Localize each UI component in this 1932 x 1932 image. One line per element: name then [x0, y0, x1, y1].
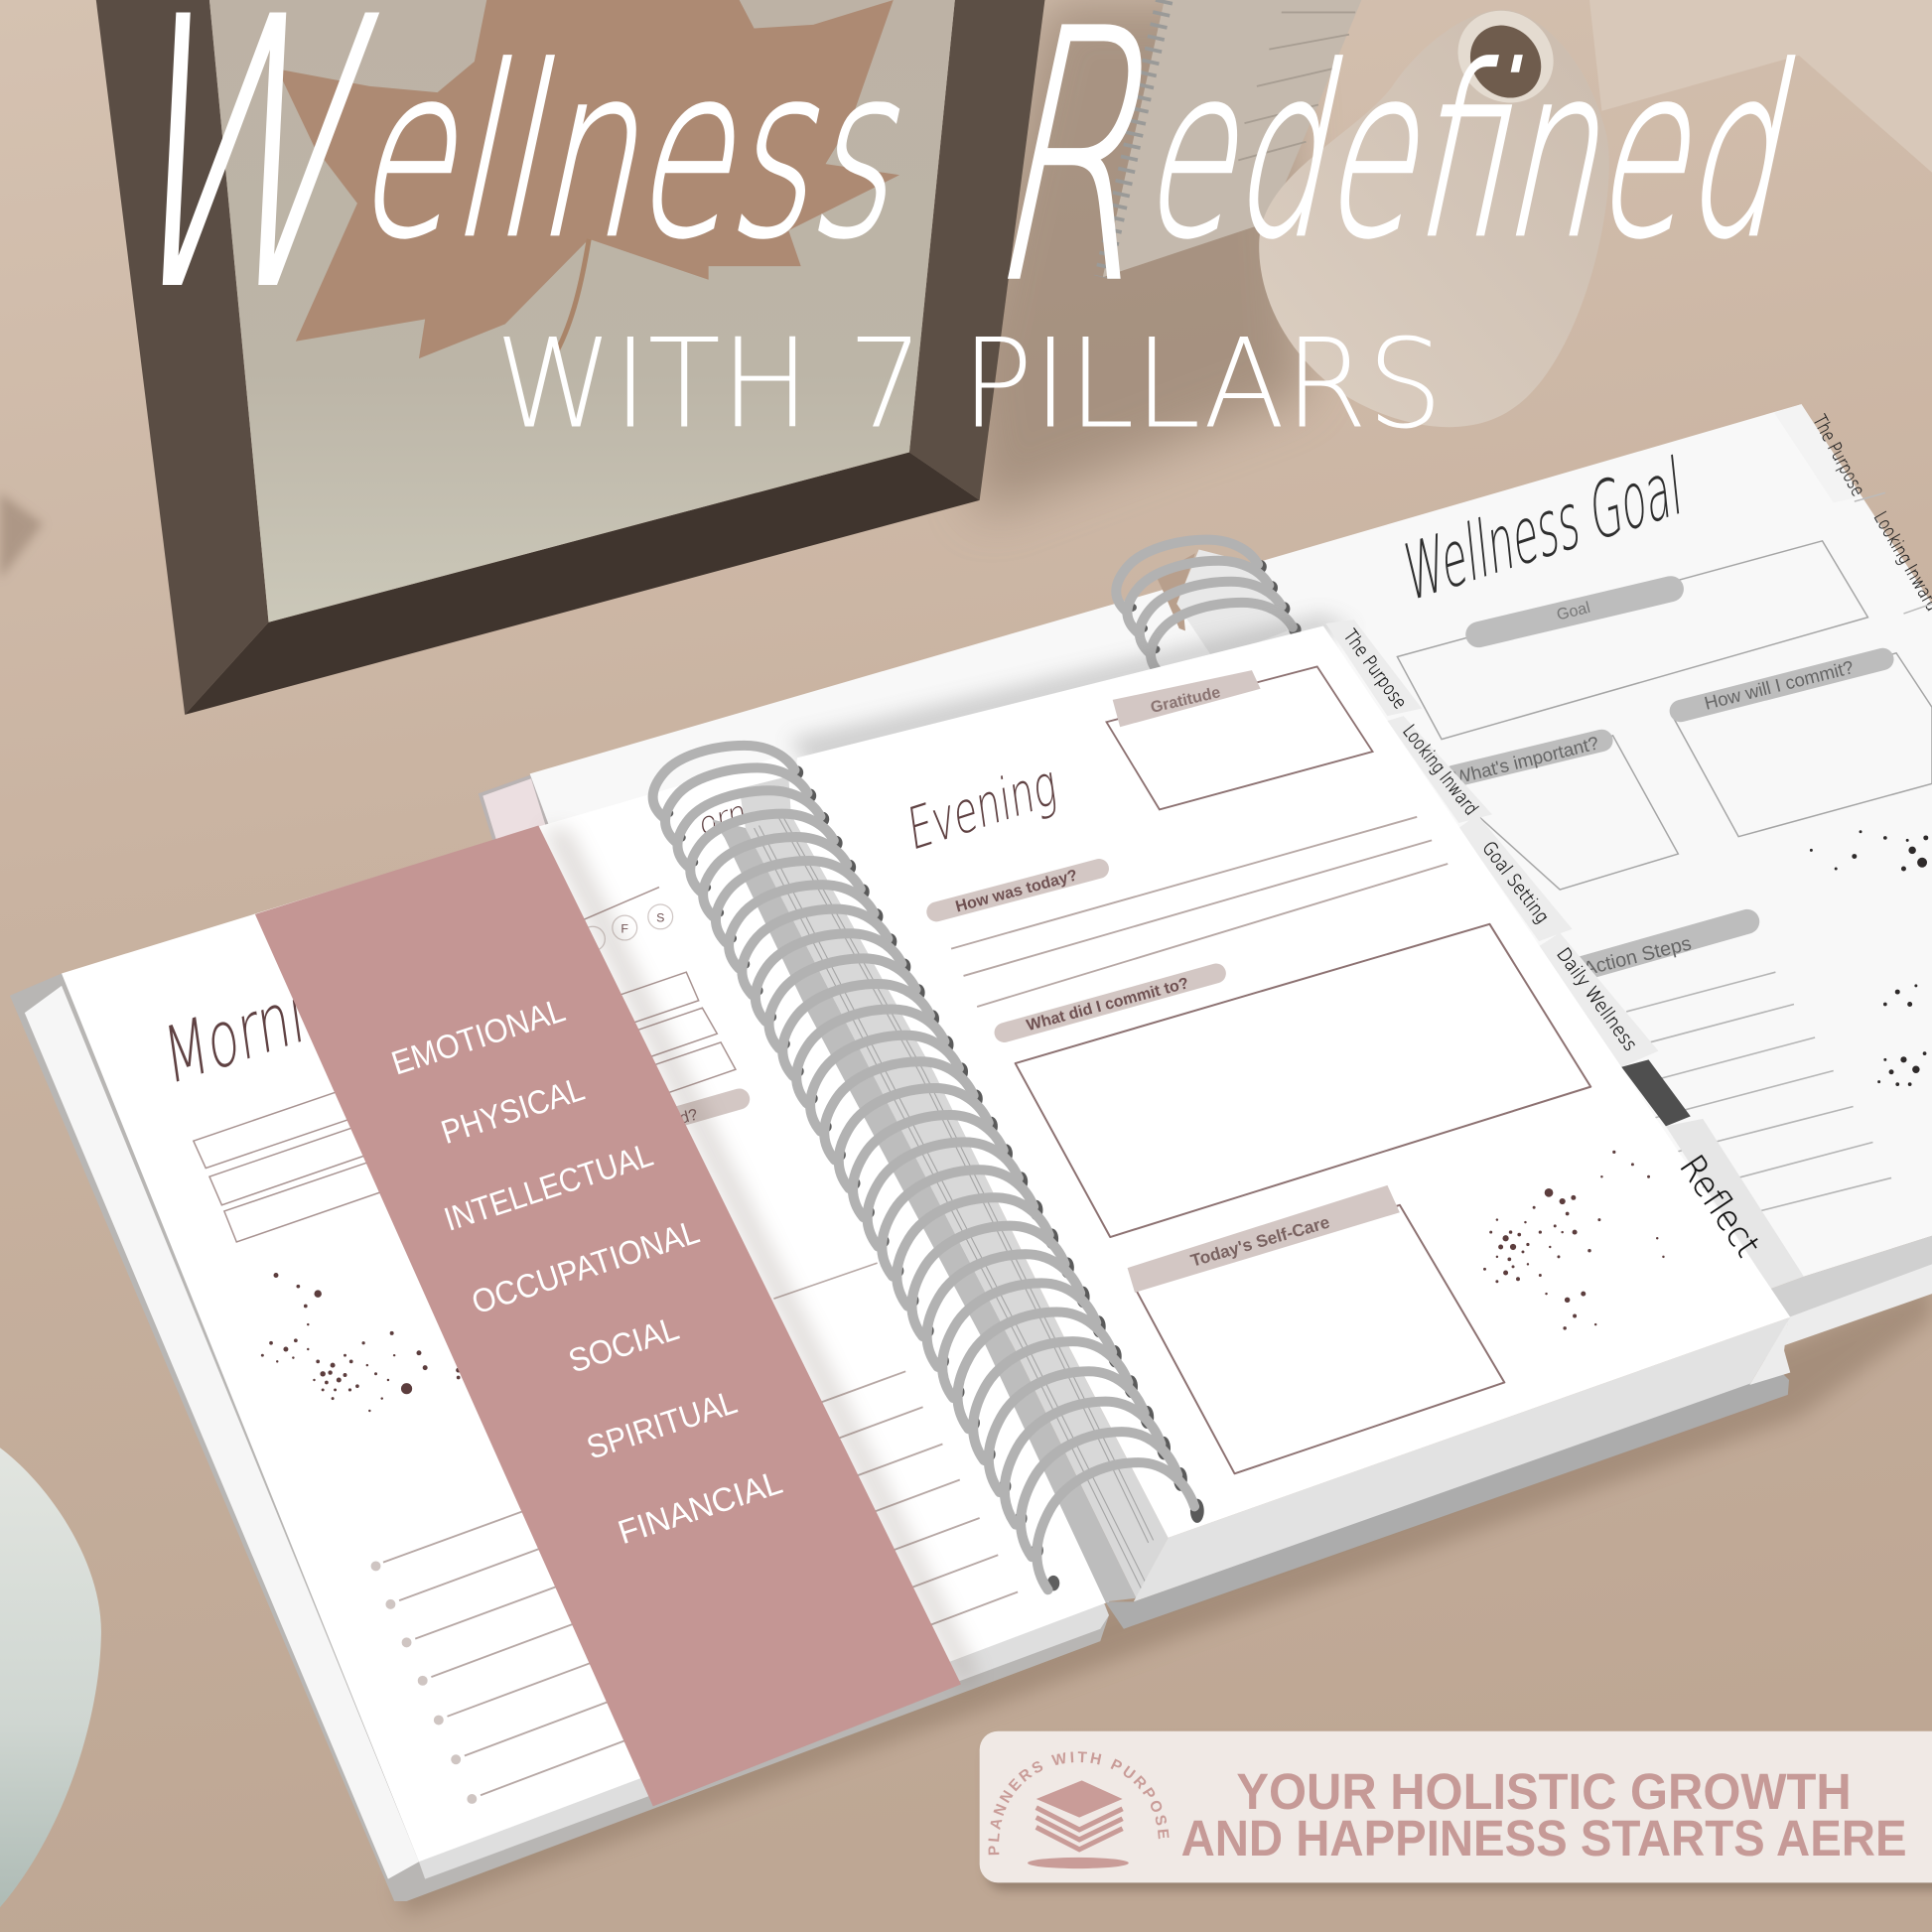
cast shadow behind frame — [961, 0, 1307, 517]
front tab labels: Goal Setting — [1477, 838, 1552, 927]
pillar list: EMOTIONAL — [387, 992, 570, 1083]
pillar list — [387, 992, 787, 1552]
front tab labels: Daily Wellness — [1552, 944, 1641, 1055]
day letters — [621, 910, 664, 935]
pillar list: INTELLECTUAL — [440, 1137, 657, 1239]
self-care box — [1135, 1205, 1504, 1473]
why important box — [1448, 736, 1678, 890]
back tabs — [1774, 404, 1861, 502]
self-care label: Today's Self-Care — [1188, 1212, 1332, 1271]
action steps label — [1565, 921, 1747, 981]
small label pill — [653, 1099, 740, 1128]
morning heading: Morning — [159, 949, 370, 1103]
front tab labels: Reflect — [1671, 1149, 1767, 1265]
front tab labels: The Purpose — [1339, 626, 1410, 713]
bullet dots — [371, 1561, 477, 1804]
left page note lines — [773, 1263, 878, 1299]
action steps label: Action Steps — [1581, 932, 1694, 981]
binding lines — [755, 813, 1154, 1598]
bookmark band — [255, 826, 961, 1806]
back page title: Wellness Goal — [1401, 441, 1686, 621]
spiral notebook behind vase — [1103, 0, 1361, 277]
back binding stack — [1176, 550, 1288, 659]
logo arc text: PLANNERS WITH PURPOSE — [989, 1751, 1170, 1855]
small label pill: d? — [678, 1106, 700, 1128]
front tab labels — [1339, 626, 1767, 1265]
picture frame with leaf — [96, 0, 1044, 715]
evening heading: Evening — [904, 751, 1060, 864]
pillar list: SPIRITUAL — [583, 1384, 742, 1467]
gratitude box — [1106, 666, 1373, 809]
pillar list: SOCIAL — [564, 1311, 683, 1380]
pillar list: OCCUPATIONAL — [468, 1214, 704, 1321]
partial heading beside rings: orn — [697, 793, 749, 843]
banner text — [1181, 1763, 1907, 1866]
front cover edge — [1105, 1370, 1789, 1629]
gratitude label: Gratitude — [1149, 683, 1222, 717]
leaf stem — [557, 239, 589, 351]
right cover strip behind — [1784, 1259, 1932, 1345]
back rings — [1116, 540, 1302, 674]
vase — [1259, 0, 1609, 427]
ink splatter right — [1483, 1151, 1665, 1330]
upper right wall light area — [1589, 0, 1932, 173]
goal label: Goal — [1555, 599, 1592, 624]
pillar list: FINANCIAL — [614, 1464, 787, 1552]
inner sheet at top of left cover — [481, 776, 548, 843]
how will I commit box — [1675, 653, 1932, 837]
how will I commit label: How will I commit? — [1702, 656, 1856, 714]
gratitude label — [1113, 670, 1261, 727]
why important label: What's important? — [1451, 732, 1600, 788]
action step lines — [1626, 972, 1891, 1220]
main title — [84, 0, 1832, 370]
spiral rings — [653, 746, 1204, 1590]
bookmark shadow — [542, 828, 980, 1688]
reflect tab — [1666, 1119, 1804, 1289]
front page shadow on back page — [788, 614, 1355, 770]
ink splatter left — [261, 1273, 461, 1412]
front tab labels: Looking Inward — [1398, 722, 1481, 820]
logo base ellipse — [1028, 1858, 1129, 1868]
logo books — [1036, 1780, 1123, 1850]
goal label — [1478, 589, 1671, 634]
logo — [989, 1751, 1170, 1868]
self-care label — [1128, 1185, 1400, 1293]
front right page — [791, 625, 1790, 1538]
main title: ellness — [342, 18, 933, 290]
commit box — [1016, 924, 1590, 1237]
bottom banner — [979, 1731, 1932, 1882]
back page notch — [1156, 553, 1195, 630]
left page — [62, 755, 1109, 1862]
line above days — [579, 888, 659, 921]
day circles — [581, 904, 673, 951]
left page block edge — [419, 1600, 1109, 1879]
how was today label: How was today? — [953, 866, 1079, 915]
banner text: YOUR HOLISTIC GROWTH — [1236, 1763, 1852, 1820]
page block below front page — [1134, 1317, 1790, 1601]
front right page tabs — [1325, 620, 1804, 1289]
day letters: S — [656, 910, 664, 924]
back tab labels: The Purpose — [1808, 412, 1868, 499]
binding strip dark — [712, 819, 1136, 1601]
goal box — [1397, 541, 1867, 740]
subtitle: WITH 7 PILLARS — [495, 313, 1443, 456]
back right page — [530, 404, 1932, 1355]
left cover — [10, 755, 1109, 1901]
small fold corner — [1749, 1320, 1790, 1385]
book shadow on table — [394, 1282, 1932, 1916]
writing lines — [951, 817, 1448, 1007]
what did I commit to label: What did I commit to? — [1025, 974, 1190, 1035]
day letters: F — [621, 921, 628, 935]
back tab labels — [1808, 412, 1932, 615]
teacup — [0, 1448, 101, 1907]
back tab dividers — [1855, 492, 1932, 614]
left table shadow — [0, 492, 43, 579]
pillar list: PHYSICAL — [437, 1071, 589, 1152]
left page under layer — [25, 986, 419, 1879]
ink splatter black — [1810, 830, 1928, 1086]
binding strip light — [712, 776, 1169, 1601]
morning input boxes — [194, 972, 736, 1242]
bullet list lines — [383, 1371, 1018, 1795]
dark tab — [1621, 1059, 1691, 1126]
banner shadow — [986, 1739, 1932, 1890]
leaf — [277, 0, 899, 358]
back page block edge — [1770, 1236, 1932, 1317]
